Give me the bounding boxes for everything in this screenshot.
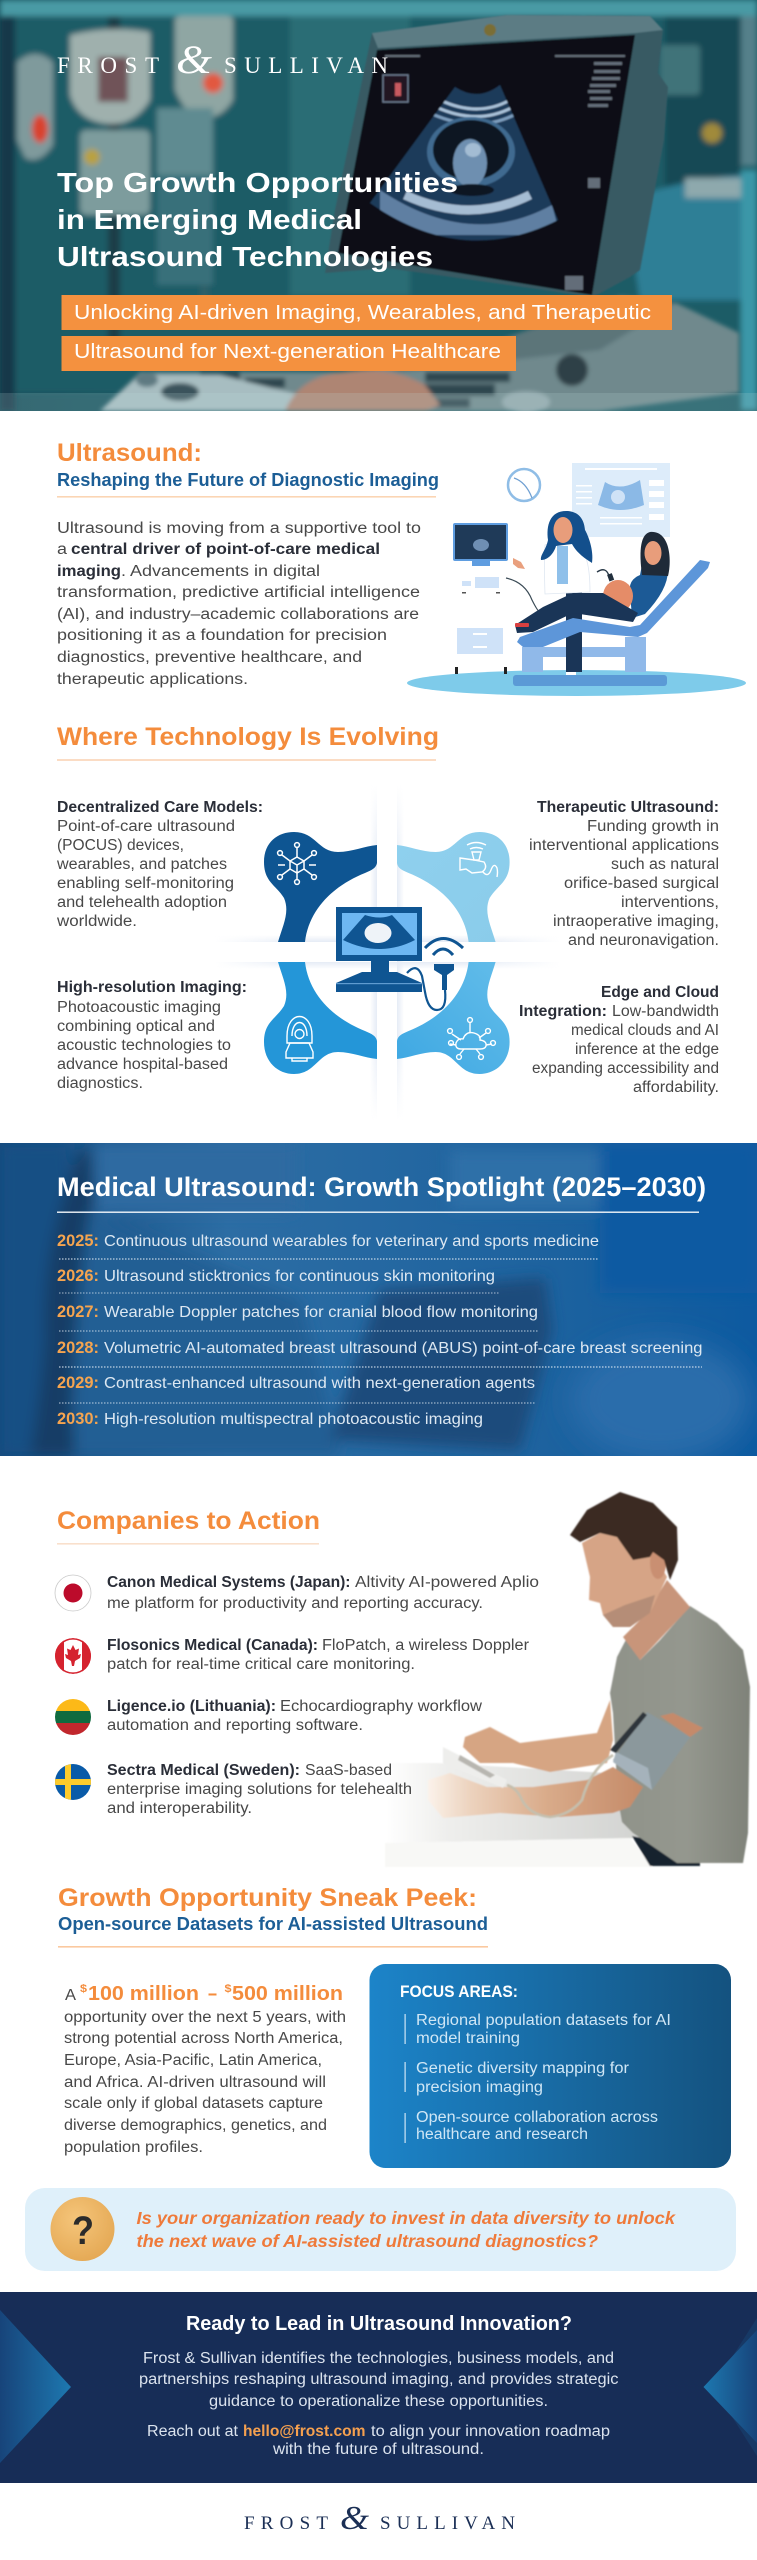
heading: Growth Opportunity Sneak Peek: (58, 1884, 477, 1912)
focus areas box: FOCUS AREAS: (400, 1982, 518, 2001)
focus areas box: model training (416, 2030, 520, 2047)
opportunity text: population profiles. (64, 2139, 203, 2156)
photo: man with blood-pressure cuff (385, 1492, 750, 1867)
petal: decentralized care (264, 832, 377, 942)
heading: where technology is evolving: Where Technology Is Evolving (57, 723, 439, 751)
opportunity text: opportunity over the next 5 years, with (64, 2009, 346, 2026)
callout: question (25, 2188, 736, 2271)
title: Ultrasound Technologies (57, 241, 433, 272)
text: therapeutic ultrasound: Funding growth in (587, 818, 719, 835)
text: edge and cloud integration: affordability. (633, 1079, 719, 1096)
icon: question mark coin: ? (72, 2209, 94, 2253)
focus areas box: precision imaging (416, 2079, 543, 2096)
company: Flosonics Medical: patch for real-time critical care monitoring. (107, 1656, 415, 1673)
opportunity text: – (208, 1982, 217, 2005)
hero photo: ultrasound machine (0, 0, 757, 413)
logo: SULLIVAN (224, 53, 388, 78)
company: Canon Medical Systems: me platform for productivity and reporting accuracy. (107, 1595, 483, 1612)
panel: call to action footer (0, 2292, 757, 2483)
petal: edge and cloud (397, 962, 510, 1074)
text: therapeutic ultrasound (529, 799, 719, 949)
opportunity text (64, 1982, 346, 2156)
row: 2027: Wearable Doppler patches for cranial blood flow monitoring (104, 1304, 538, 1321)
text: decentralized care models (56, 799, 263, 930)
intro text: imaging (57, 563, 121, 580)
text: high-resolution imaging: diagnostics. (57, 1075, 143, 1092)
title: in Emerging Medical (57, 204, 362, 235)
subtitle banner line 2: Ultrasound for Next-generation Healthcare (74, 341, 501, 363)
text: edge and cloud integration: medical clouds and AI (571, 1022, 719, 1039)
logo: FROST (57, 53, 159, 78)
opportunity text: 100 million (88, 1982, 199, 2005)
footer text: partnerships reshaping ultrasound imaging, and provides strategic (139, 2371, 619, 2388)
footer text: with the future of ultrasound. (272, 2441, 484, 2458)
row: 2029: Contrast-enhanced ultrasound with next-generation agents (104, 1375, 535, 1392)
footer text: Frost & Sullivan identifies the technologies, business models, and (143, 2350, 614, 2367)
opportunity text: and Africa. AI-driven ultrasound will (64, 2074, 326, 2091)
callout text: the next wave of AI-assisted ultrasound diagnostics? (136, 2231, 598, 2251)
company: Flosonics Medical (55, 1637, 529, 1674)
focus areas box: Regional population datasets for AI (416, 2012, 671, 2029)
intro text: diagnostics, preventive healthcare, and (57, 649, 362, 666)
footer text: hello@frost.com (243, 2423, 366, 2440)
text: therapeutic ultrasound: and neuronavigation. (568, 932, 719, 949)
icon: brain (364, 923, 392, 943)
opportunity text: A (65, 1987, 77, 2004)
row: 2029: 2029: (57, 1374, 99, 1392)
company: Ligence.io: Ligence.io (Lithuania): (107, 1698, 276, 1715)
focus areas box: healthcare and research (416, 2126, 588, 2143)
intro text: Ultrasound is moving from a supportive tool to (57, 520, 421, 537)
logo: footer (244, 2500, 515, 2537)
intro text: central driver of point-of-care medical (71, 541, 380, 558)
opportunity text: $ (224, 1983, 232, 1995)
text: therapeutic ultrasound: interventional applications (529, 837, 719, 854)
text: edge and cloud integration: Low-bandwidth (612, 1003, 719, 1020)
title (57, 167, 458, 272)
panel: technology quadrant diagram (245, 814, 530, 1092)
text: therapeutic ultrasound: interventions, (621, 894, 719, 911)
icon: question mark coin (50, 2197, 114, 2261)
heading: Ready to Lead in Ultrasound Innovation? (186, 2313, 572, 2335)
intro text: . Advancements in digital (121, 563, 320, 580)
footer text: guidance to operationalize these opportunities. (209, 2393, 548, 2410)
icon: MRI scanner (286, 1016, 313, 1061)
text: high-resolution imaging (57, 979, 247, 1092)
text: edge and cloud integration: inference at the edge (575, 1041, 719, 1058)
flag: Canada (55, 1638, 91, 1674)
heading: ultrasound: Ultrasound: (57, 439, 202, 467)
footer text: Reach out at (147, 2423, 239, 2440)
title: Top Growth Opportunities (57, 167, 458, 198)
row: 2026: Ultrasound sticktronics for continuous skin monitoring (104, 1268, 495, 1285)
opportunity text: $ (80, 1983, 87, 1995)
text: decentralized care models: Decentralized Care Models: (57, 799, 263, 816)
logo: & (176, 37, 212, 82)
focus areas box (370, 1964, 731, 2168)
icon: central ultrasound monitor (336, 907, 463, 1010)
company: Sectra Medical: enterprise imaging solutions for telehealth (107, 1781, 412, 1798)
flag: Lithuania (55, 1699, 91, 1735)
text: therapeutic ultrasound: orifice-based surgical (564, 875, 719, 892)
logo (57, 37, 388, 82)
company: Sectra Medical: and interoperability. (107, 1800, 252, 1817)
callout text: Is your organization ready to invest in data diversity to unlock (136, 2208, 676, 2228)
chevron right (704, 2318, 757, 2456)
subheading: Open-source Datasets for AI-assisted Ultrasound (58, 1914, 488, 1934)
intro text: therapeutic applications. (57, 671, 248, 688)
company: Flosonics Medical: FloPatch, a wireless Doppler (322, 1637, 529, 1654)
text: decentralized care models: Point-of-care ultrasound (57, 818, 235, 835)
icon: hand with probe (460, 842, 498, 877)
subheading: Reshaping the Future of Diagnostic Imaging (57, 470, 439, 490)
text: high-resolution imaging: High-resolution Imaging: (57, 979, 247, 996)
subtitle banner line 1 (62, 295, 672, 330)
panel: growth opportunity sneak peek (58, 1884, 731, 2168)
subtitle banner line 1: Unlocking AI-driven Imaging, Wearables, and Therapeutic (74, 302, 651, 324)
illustration: doctor and patient (407, 463, 746, 696)
company: Flosonics Medical: Flosonics Medical (Canada): (107, 1637, 318, 1654)
row: 2025: Continuous ultrasound wearables for veterinary and sports medicine (104, 1233, 599, 1250)
opportunity text: strong potential across North America, (64, 2030, 343, 2047)
company: Sectra Medical (55, 1762, 412, 1817)
heading: Companies to Action (57, 1507, 320, 1535)
panel: ultrasound intro (57, 439, 746, 696)
text: high-resolution imaging: combining optical and (57, 1018, 215, 1035)
text: decentralized care models: worldwide. (56, 913, 137, 930)
text: decentralized care models: and telehealth adoption (57, 894, 227, 911)
panel: hero (0, 0, 757, 413)
company: Canon Medical Systems (55, 1574, 539, 1612)
logo: footer: SULLIVAN (380, 2513, 515, 2534)
company: Canon Medical Systems: Altivity AI-powered Aplio (355, 1574, 539, 1591)
icon: network cube (278, 843, 316, 884)
background photo: clinician with tablet (0, 1143, 757, 1460)
intro text: (AI), and industry–academic collaborations are (57, 606, 419, 623)
subtitle banner line 2 (62, 336, 516, 371)
text: high-resolution imaging: Photoacoustic imaging (57, 999, 221, 1016)
petal: high-resolution imaging (264, 962, 377, 1074)
focus areas box: Genetic diversity mapping for (416, 2060, 629, 2077)
row: 2028: 2028: (57, 1339, 99, 1357)
company: Sectra Medical: Sectra Medical (Sweden): (107, 1762, 300, 1779)
row: 2025: 2025: (57, 1232, 99, 1250)
text: decentralized care models: (POCUS) devices, (57, 837, 184, 854)
focus areas box: Open-source collaboration across (416, 2109, 658, 2126)
company: Ligence.io (55, 1698, 483, 1735)
logo: footer: FROST (244, 2513, 328, 2534)
text: edge and cloud integration: expanding accessibility and (532, 1060, 719, 1077)
panel: growth spotlight (0, 1143, 757, 1460)
text: decentralized care models: wearables, and patches (56, 856, 227, 873)
text: edge and cloud integration: Edge and Cloud (601, 984, 719, 1001)
text: therapeutic ultrasound: Therapeutic Ultrasound: (537, 799, 719, 816)
text: therapeutic ultrasound: such as natural (611, 856, 719, 873)
text: edge and cloud integration: Integration: (519, 1003, 607, 1020)
logo: footer: & (340, 2500, 370, 2537)
text: edge and cloud integration (519, 984, 719, 1096)
company: Canon Medical Systems: Canon Medical Systems (Japan): (107, 1574, 350, 1591)
text: high-resolution imaging: advance hospital-based (57, 1056, 228, 1073)
row: 2026: 2026: (57, 1267, 99, 1285)
text: high-resolution imaging: acoustic technologies to (57, 1037, 231, 1054)
intro text: a (57, 541, 67, 558)
intro text (57, 520, 421, 688)
row: 2028: Volumetric AI-automated breast ultrasound (ABUS) point-of-care breast screening (104, 1340, 702, 1357)
text: decentralized care models: enabling self-monitoring (57, 875, 234, 892)
monitor (325, 15, 668, 297)
text: therapeutic ultrasound: intraoperative imaging, (553, 913, 719, 930)
callout text (136, 2208, 676, 2251)
icon: cloud network (448, 1018, 495, 1059)
company: Ligence.io: Echocardiography workflow (280, 1698, 483, 1715)
footer text: to align your innovation roadmap (371, 2423, 610, 2440)
panel: companies to action (55, 1492, 750, 1867)
heading: Medical Ultrasound: Growth Spotlight (2025–2030) (57, 1172, 706, 1202)
opportunity text: diverse demographics, genetics, and (64, 2117, 327, 2134)
intro text: transformation, predictive artificial intelligence (57, 584, 420, 601)
row: 2030: 2030: (57, 1410, 99, 1428)
console (100, 296, 739, 413)
row: 2030: High-resolution multispectral photoacoustic imaging (104, 1411, 483, 1428)
company: Sectra Medical: SaaS-based (305, 1762, 392, 1779)
row: 2027: 2027: (57, 1303, 99, 1321)
opportunity text: scale only if global datasets capture (64, 2095, 323, 2112)
footer text (139, 2350, 619, 2458)
intro text: positioning it as a foundation for precision (57, 627, 387, 644)
company: Ligence.io: automation and reporting software. (107, 1717, 363, 1734)
opportunity text: 500 million (232, 1982, 343, 2005)
opportunity text: Europe, Asia-Pacific, Latin America, (64, 2052, 322, 2069)
flag: Japan (55, 1575, 91, 1611)
flag: Sweden (55, 1764, 91, 1800)
petal: therapeutic ultrasound (397, 832, 510, 942)
chevron left (0, 2310, 71, 2463)
